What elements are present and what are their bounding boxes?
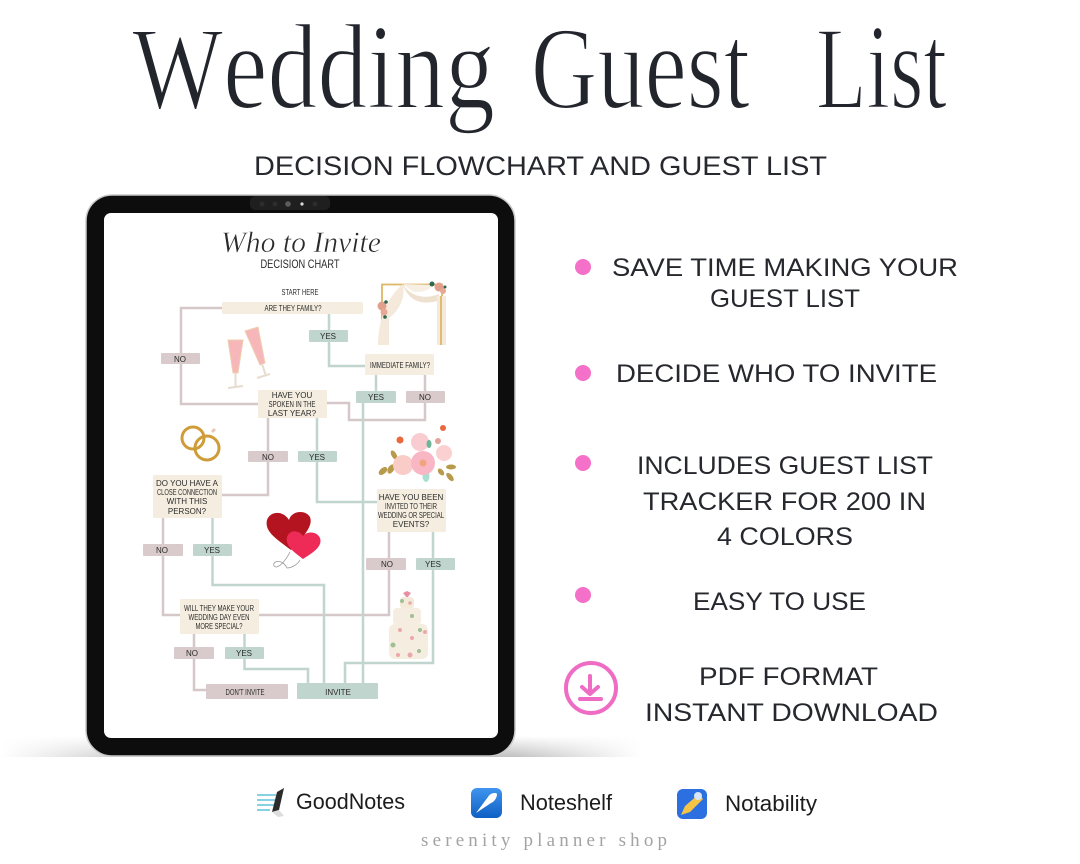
bullet: save time: GUEST LIST xyxy=(710,285,860,313)
question: more special xyxy=(180,599,259,634)
title xyxy=(132,0,947,135)
yes tag xyxy=(416,558,455,570)
pdf format text: PDF FORMAT xyxy=(699,663,878,691)
yes tag: YES xyxy=(204,546,220,555)
bullet: save time xyxy=(575,254,958,313)
question: immediate family: IMMEDIATE FAMILY? xyxy=(370,361,430,370)
yes tag xyxy=(309,330,348,342)
no tag xyxy=(143,544,183,556)
app: Notability: Notability xyxy=(725,791,817,816)
icon: flower bouquet xyxy=(377,425,456,482)
outcome: don't invite xyxy=(206,684,288,699)
icon: champagne glasses xyxy=(228,327,270,388)
tablet screen xyxy=(104,213,498,738)
app: GoodNotes: GoodNotes xyxy=(296,789,405,814)
yes tag xyxy=(193,544,232,556)
subtitle: DECISION FLOWCHART AND GUEST LIST xyxy=(254,151,827,181)
bullet: easy to use: EASY TO USE xyxy=(693,588,866,616)
flowchart connectors xyxy=(163,308,433,690)
icon: GoodNotes pen xyxy=(257,788,284,817)
answer tags xyxy=(143,330,455,699)
yes tag: YES xyxy=(425,560,441,569)
no tag: NO xyxy=(262,453,274,462)
question: invited to their wedding: HAVE YOU BEEN xyxy=(379,493,444,502)
question: more special: MORE SPECIAL? xyxy=(196,622,243,631)
icon: gold rings xyxy=(182,427,219,460)
yes tag xyxy=(356,391,396,403)
question: close connection: PERSON? xyxy=(168,507,207,516)
yes tag xyxy=(298,451,337,462)
no tag: NO xyxy=(174,355,186,364)
outcome: don't invite: DON'T INVITE xyxy=(226,688,264,697)
app: Notability xyxy=(677,789,817,819)
no tag: NO xyxy=(381,560,393,569)
chart heading: Who to Invite xyxy=(221,226,381,259)
question: invited to their wedding xyxy=(377,489,446,532)
pdf format text: INSTANT DOWNLOAD xyxy=(645,699,938,727)
question: invited to their wedding: INVITED TO THEIR xyxy=(385,502,437,511)
no tag: NO xyxy=(156,546,168,555)
bullet: tracker: INCLUDES GUEST LIST xyxy=(637,452,933,480)
tablet device xyxy=(86,195,515,756)
app: Noteshelf xyxy=(471,788,613,818)
icon: wedding arch xyxy=(378,282,446,345)
no tag xyxy=(248,451,288,462)
icon: heart balloons xyxy=(267,512,321,568)
bullet: tracker xyxy=(575,452,933,551)
outcome: invite xyxy=(297,683,378,699)
no tag xyxy=(161,353,200,364)
chart heading: DECISION CHART xyxy=(260,257,340,271)
shop name: serenity planner shop xyxy=(421,830,667,851)
no tag: NO xyxy=(419,393,431,402)
question: invited to their wedding: EVENTS? xyxy=(393,520,430,529)
no tag: NO xyxy=(186,649,198,658)
title: Guest xyxy=(531,0,750,135)
pdf format text xyxy=(645,663,938,727)
app: GoodNotes xyxy=(257,788,405,817)
app: Noteshelf: Noteshelf xyxy=(520,790,613,815)
question: close connection: CLOSE CONNECTION xyxy=(157,488,217,497)
bullet: tracker: 4 COLORS xyxy=(717,523,853,551)
icon: Noteshelf xyxy=(471,788,502,818)
icon: wedding cake xyxy=(389,591,428,659)
no tag xyxy=(406,391,445,403)
icon: download xyxy=(566,663,616,713)
bullet list xyxy=(566,254,958,727)
question: are they family xyxy=(222,302,363,314)
question: close connection: WITH THIS xyxy=(167,497,207,506)
icon: Notability xyxy=(677,789,707,819)
bullet: save time: SAVE TIME MAKING YOUR xyxy=(612,254,958,282)
question: close connection: DO YOU HAVE A xyxy=(156,479,219,488)
title: List xyxy=(816,0,947,135)
question: spoken last year xyxy=(258,390,327,418)
yes tag: YES xyxy=(236,649,252,658)
tablet shadow xyxy=(0,736,640,757)
camera bar xyxy=(250,196,330,210)
question: are they family: ARE THEY FAMILY? xyxy=(264,304,322,313)
title: Wedding xyxy=(132,0,495,135)
question: close connection xyxy=(153,475,222,518)
question: spoken last year: SPOKEN IN THE xyxy=(268,400,316,409)
question: more special: WEDDING DAY EVEN xyxy=(188,613,250,622)
question: immediate family xyxy=(365,354,434,375)
yes tag: YES xyxy=(368,393,384,402)
question: spoken last year: HAVE YOU xyxy=(272,391,313,400)
no tag xyxy=(174,647,214,659)
yes tag: YES xyxy=(309,453,325,462)
question: spoken last year: LAST YEAR? xyxy=(268,409,317,418)
question: more special: WILL THEY MAKE YOUR xyxy=(184,604,254,613)
no tag xyxy=(366,558,406,570)
question: invited to their wedding: WEDDING OR SPECIAL xyxy=(378,511,444,520)
start label: START HERE xyxy=(282,288,318,297)
bullet: decide who: DECIDE WHO TO INVITE xyxy=(616,360,937,388)
yes tag xyxy=(225,647,264,659)
yes tag: YES xyxy=(320,332,336,341)
bullet: tracker: TRACKER FOR 200 IN xyxy=(643,488,926,516)
outcome: invite: INVITE xyxy=(325,688,351,697)
question boxes xyxy=(153,302,446,634)
bullet: easy to use xyxy=(575,587,866,616)
